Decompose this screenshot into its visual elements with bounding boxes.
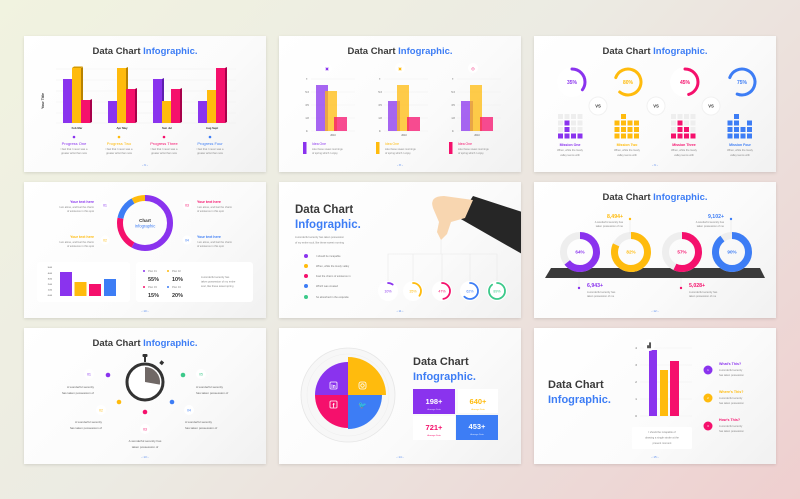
legend: Progress Two — [107, 141, 132, 146]
bar chart: Apr May — [116, 126, 128, 130]
chart group 1: 1.8 — [305, 117, 309, 120]
title — [295, 204, 361, 231]
slide 3: missions rings: 75% — [737, 80, 748, 86]
donut chart — [120, 198, 170, 248]
text items: Your text here — [197, 200, 221, 204]
text items: I am alone, and feel the charm — [197, 240, 232, 244]
legend: I feel that I never was a — [61, 147, 88, 151]
dots — [106, 373, 185, 414]
descriptions: has taken possession of — [196, 391, 228, 395]
callouts: A wonderful serenity has — [595, 220, 624, 224]
badges: 04 — [187, 408, 191, 412]
legend: greater artist than now — [151, 151, 177, 155]
question items: A wonderful serenity — [719, 424, 743, 428]
chart group 1: 2010 — [330, 134, 336, 137]
bar chart — [635, 339, 692, 418]
legend: of spring which I enjoy — [312, 151, 338, 155]
slide 3: missions rings: 45% — [680, 80, 691, 86]
chart group 3: 3.5 — [451, 104, 455, 107]
descriptions: has taken possession of — [185, 426, 217, 430]
slide 8: social pie: ‹ 14 › — [396, 455, 404, 459]
chart group 1: 3.5 — [305, 104, 309, 107]
slide 7: stopwatch — [24, 328, 266, 464]
card: bar chart: 0.00 — [48, 295, 53, 297]
question items: How's This? — [719, 418, 740, 422]
chart group 3: 5.3 — [451, 91, 455, 94]
text items: I am alone, and feel the charm — [59, 240, 94, 244]
description — [295, 235, 345, 244]
text items: of existence in this spot — [197, 244, 224, 248]
stat boxes: 198+ — [426, 397, 443, 406]
descriptions: taken possession of — [132, 445, 158, 449]
slide 4: donut with cards — [24, 182, 266, 318]
caption card — [632, 427, 692, 449]
chart group 3: 1.8 — [451, 117, 455, 120]
mission labels: Mission Two — [617, 143, 637, 147]
text items: I am alone, and feel the charm — [197, 205, 232, 209]
legend: Progress Four — [197, 141, 223, 146]
bar chart: Aug Sept — [206, 126, 218, 130]
donuts: 57% — [677, 250, 687, 255]
title: Data Chart Infographic. — [602, 46, 708, 57]
bar chart — [41, 66, 236, 130]
chart group 1: 7. — [306, 78, 308, 81]
chart group 2: 3.5 — [378, 104, 382, 107]
question items: 1 — [707, 368, 709, 372]
card: plan stats: 55% — [148, 277, 159, 283]
mission labels: valley teems with — [674, 153, 694, 157]
slide 1: 3D bar chart: ‹ 9 › — [142, 163, 148, 167]
text items: of existence in this spot — [67, 209, 94, 213]
chart group 2: 2010 — [401, 134, 407, 137]
stat boxes: 721+ — [426, 423, 443, 432]
slide 5: hand with percentage circles: ‹ 11 › — [397, 309, 403, 313]
description: of my entire soul, like these sweet morning — [295, 240, 345, 244]
mission labels: Mission Four — [729, 143, 752, 147]
legend: Idea One — [312, 142, 326, 146]
stat boxes: 640+ — [470, 397, 487, 406]
bar chart: Feb Mar — [72, 126, 83, 130]
slide 7: stopwatch: ‹ 13 › — [141, 455, 149, 459]
title: Data Chart Infographic. — [602, 192, 708, 203]
icons — [322, 63, 478, 73]
text items: of existence in this spot — [67, 244, 94, 248]
list: I should be incapable — [316, 254, 341, 258]
bar chart: 1 — [635, 398, 637, 401]
card: bar chart: 1.00 — [48, 290, 53, 292]
stat boxes: Average Data — [427, 408, 441, 411]
legend: Like these sweet mornings — [385, 147, 416, 151]
question items: What's This? — [719, 362, 741, 366]
card: plan stats: 10% — [172, 277, 183, 283]
pie chart: in — [331, 384, 336, 390]
mission labels: When, while the lovely — [614, 148, 641, 152]
legend — [61, 136, 224, 155]
stat boxes: Average Data — [470, 433, 484, 436]
card: plan stats: Plan 01 — [148, 269, 157, 273]
legend: Idea One — [385, 142, 399, 146]
card: bar chart — [37, 262, 130, 302]
vs badges — [589, 97, 720, 115]
callouts: taken possession of me — [587, 294, 615, 298]
mission labels: When, while the lovely — [727, 148, 754, 152]
chart group 1: 5.3 — [305, 91, 309, 94]
text items: of existence in this spot — [197, 209, 224, 213]
slide 3: missions rings: ‹ 9 › — [652, 163, 658, 167]
text items: I am alone, and feel the charm — [59, 205, 94, 209]
badges: 03 — [143, 427, 147, 431]
text items — [59, 200, 232, 248]
legend: I feel that I never was a — [197, 147, 224, 151]
chart group 2: 5.3 — [378, 91, 382, 94]
rings — [557, 65, 759, 99]
donuts: 90% — [727, 250, 737, 255]
icons: ▣ — [398, 66, 402, 71]
list — [304, 254, 351, 299]
legend: greater artist than now — [197, 151, 223, 155]
slide 9: bar chart with questions — [534, 328, 776, 464]
mission labels — [557, 143, 754, 157]
slide 9: bar chart with questions: ‹ 15 › — [651, 455, 659, 459]
list: So absorbed in the exquisite — [316, 295, 349, 299]
description: A wonderful serenity has taken possession — [295, 235, 345, 239]
platform — [545, 268, 765, 278]
percent circles: 35% — [409, 289, 417, 293]
connector tree — [388, 240, 497, 282]
legend: I feel that I never was a — [106, 147, 133, 151]
percent circles — [378, 281, 507, 301]
title: Data Chart Infographic. — [92, 46, 198, 57]
chart group 2: 0. — [379, 130, 381, 133]
mission labels: When, while the lovely — [671, 148, 698, 152]
hand illustration — [432, 196, 522, 254]
slide 2: grouped bar charts: ‹ 8 › — [397, 163, 403, 167]
descriptions: A wonderful serenity — [196, 385, 224, 389]
card: plan stats: Plan 03 — [148, 285, 157, 289]
card: plan stats: soul, like these sweet spring — [201, 284, 234, 288]
slide 4: donut with cards: ‹ 10 › — [141, 309, 149, 313]
slide 8: social pie — [279, 328, 521, 464]
badges: 01 — [87, 372, 91, 376]
badges: 05 — [199, 372, 203, 376]
text items: Your text here — [70, 200, 94, 204]
donuts: 64% — [575, 250, 585, 255]
percent circles: 62% — [466, 289, 474, 293]
card: plan stats: Plan 02 — [172, 269, 181, 273]
callouts: A wonderful serenity has — [696, 220, 725, 224]
text items: 02 — [103, 238, 107, 242]
donuts: 82% — [626, 250, 636, 255]
title: Data Chart — [548, 379, 604, 391]
chart group 2: 7. — [379, 78, 381, 81]
text items: Your text here — [70, 235, 94, 239]
descriptions: has taken possession of — [70, 426, 102, 430]
chart group 2 — [378, 78, 428, 137]
icons: ▣ — [325, 66, 329, 71]
card: plan stats: 15% — [148, 293, 159, 299]
slide 3: missions rings: 80% — [623, 80, 634, 86]
question items — [704, 362, 745, 433]
vs badges: VS — [653, 104, 659, 108]
bar chart: Your Title — [41, 93, 45, 109]
callouts: 8,494+ — [607, 214, 623, 220]
legend: of spring which I enjoy — [458, 151, 484, 155]
bar chart: Sun Jul — [162, 126, 172, 130]
stat boxes: 453+ — [469, 422, 486, 431]
donut chart: Infographic — [135, 224, 155, 228]
donut chart: Chart — [139, 218, 151, 223]
card: plan stats: taken possession of my entire — [201, 280, 236, 284]
callouts: taken possession of me — [689, 294, 717, 298]
stat boxes: Average Data — [427, 434, 441, 437]
bar chart: ▟ — [646, 342, 651, 349]
stopwatch icon — [127, 354, 164, 400]
chart group 1 — [305, 78, 355, 137]
descriptions: A wonderful serenity — [75, 420, 102, 424]
title: Data Chart Infographic. — [92, 338, 198, 349]
vs badges: VS — [708, 104, 714, 108]
title: Infographic. — [295, 219, 361, 231]
badges — [84, 369, 206, 434]
descriptions: A wonderful serenity has — [129, 439, 162, 443]
donuts — [564, 236, 748, 268]
title: Infographic. — [548, 394, 611, 406]
card: bar chart: 5.00 — [48, 267, 53, 269]
descriptions — [62, 385, 228, 449]
callouts: A wonderful serenity has — [689, 290, 718, 294]
legend: greater artist than now — [61, 151, 87, 155]
card: plan stats: Plan 04 — [172, 285, 181, 289]
mission labels: valley teems with — [560, 153, 580, 157]
caption card: I should be incapable of — [648, 430, 676, 434]
mission labels: valley teems with — [617, 153, 637, 157]
title: Infographic. — [413, 371, 476, 383]
text items: 03 — [185, 203, 189, 207]
bar chart: 4 — [635, 347, 637, 350]
card: bar chart: 2.00 — [48, 284, 53, 286]
list: Which was created — [316, 284, 338, 288]
callouts: 5,028+ — [689, 283, 705, 289]
bar chart: 2 — [635, 381, 637, 384]
bar chart: 0 — [635, 415, 637, 418]
mission labels: valley teems with — [730, 153, 750, 157]
chart group 3: 7. — [452, 78, 454, 81]
block grids — [558, 114, 752, 138]
callouts: taken possession of me — [596, 224, 624, 228]
stat boxes — [413, 389, 498, 440]
title: Data Chart Infographic. — [347, 46, 453, 57]
slide 6: donuts on platform — [534, 182, 776, 318]
question items: Where's This? — [719, 390, 743, 394]
title: Data Chart — [413, 356, 469, 368]
vs badges: VS — [595, 104, 601, 108]
chart group 1: 0. — [306, 130, 308, 133]
mission labels: Mission Three — [672, 143, 696, 147]
slide 2: grouped bar charts — [279, 36, 521, 172]
card: plan stats: 20% — [172, 293, 183, 299]
percent circles: 89% — [493, 289, 501, 293]
callouts — [578, 214, 732, 298]
slide 6: donuts on platform: ‹ 12 › — [651, 309, 659, 313]
legend: Progress One — [62, 141, 87, 146]
bar chart: 3 — [635, 364, 637, 367]
chart group 3: 0. — [452, 130, 454, 133]
pie chart — [301, 348, 395, 442]
callouts: 9,102+ — [708, 214, 724, 220]
stat boxes: Average Data — [471, 408, 485, 411]
question items: has taken possession — [719, 401, 745, 405]
callouts: taken possession of me — [697, 224, 725, 228]
card: bar chart: 3.00 — [48, 278, 53, 280]
title — [548, 379, 611, 406]
slide 5: hand with percentage circles — [279, 182, 521, 318]
text items: 01 — [103, 203, 107, 207]
legend: of spring which I enjoy — [385, 151, 411, 155]
descriptions: A wonderful serenity — [185, 420, 213, 424]
pie chart: f — [332, 404, 336, 410]
list: Feel the charm of existence in — [316, 274, 351, 278]
question items: 3 — [707, 424, 709, 428]
slide 1: 3D bar chart — [24, 36, 266, 172]
descriptions: has taken possession of — [62, 391, 94, 395]
descriptions: A wonderful serenity — [67, 385, 94, 389]
percent circles: 10% — [384, 289, 392, 293]
caption card: drawing a single stroke at the — [645, 436, 679, 440]
callouts: 6,943+ — [587, 283, 603, 289]
question items: A wonderful serenity — [719, 368, 743, 372]
callouts: A wonderful serenity has — [587, 290, 616, 294]
question items: 2 — [707, 396, 709, 400]
card: bar chart: 4.00 — [48, 273, 53, 275]
legend: greater artist than now — [106, 151, 132, 155]
legend: Like these sweet mornings — [458, 147, 489, 151]
text items: Your text here — [197, 235, 221, 239]
question items: has taken possession — [719, 429, 745, 433]
slide 3: missions rings — [534, 36, 776, 172]
caption card: present moment — [653, 441, 672, 445]
legend: Progress Three — [150, 141, 179, 146]
mission labels: Mission One — [560, 143, 580, 147]
legend — [303, 142, 489, 155]
text items: 04 — [185, 238, 189, 242]
slide 3: missions rings: 35% — [567, 80, 578, 86]
mission labels: When, while the lovely — [557, 148, 584, 152]
badges: 02 — [99, 408, 103, 412]
legend: I feel that I never was a — [151, 147, 178, 151]
pie chart: 🐦 — [358, 402, 367, 410]
question items: A wonderful serenity — [719, 396, 743, 400]
title: Data Chart — [295, 204, 353, 216]
card: plan stats: A wonderful serenity has — [201, 275, 230, 279]
chart group 3: 2010 — [474, 134, 480, 137]
percent circles: 47% — [438, 289, 446, 293]
title — [413, 356, 476, 383]
chart group 3 — [451, 78, 501, 137]
icons: ◎ — [471, 66, 475, 71]
legend: Like these sweet mornings — [312, 147, 343, 151]
card: plan stats — [136, 262, 253, 302]
list: When, while the lovely valley — [316, 264, 350, 268]
legend: Idea One — [458, 142, 472, 146]
chart group 2: 1.8 — [378, 117, 382, 120]
question items: has taken possession — [719, 373, 745, 377]
